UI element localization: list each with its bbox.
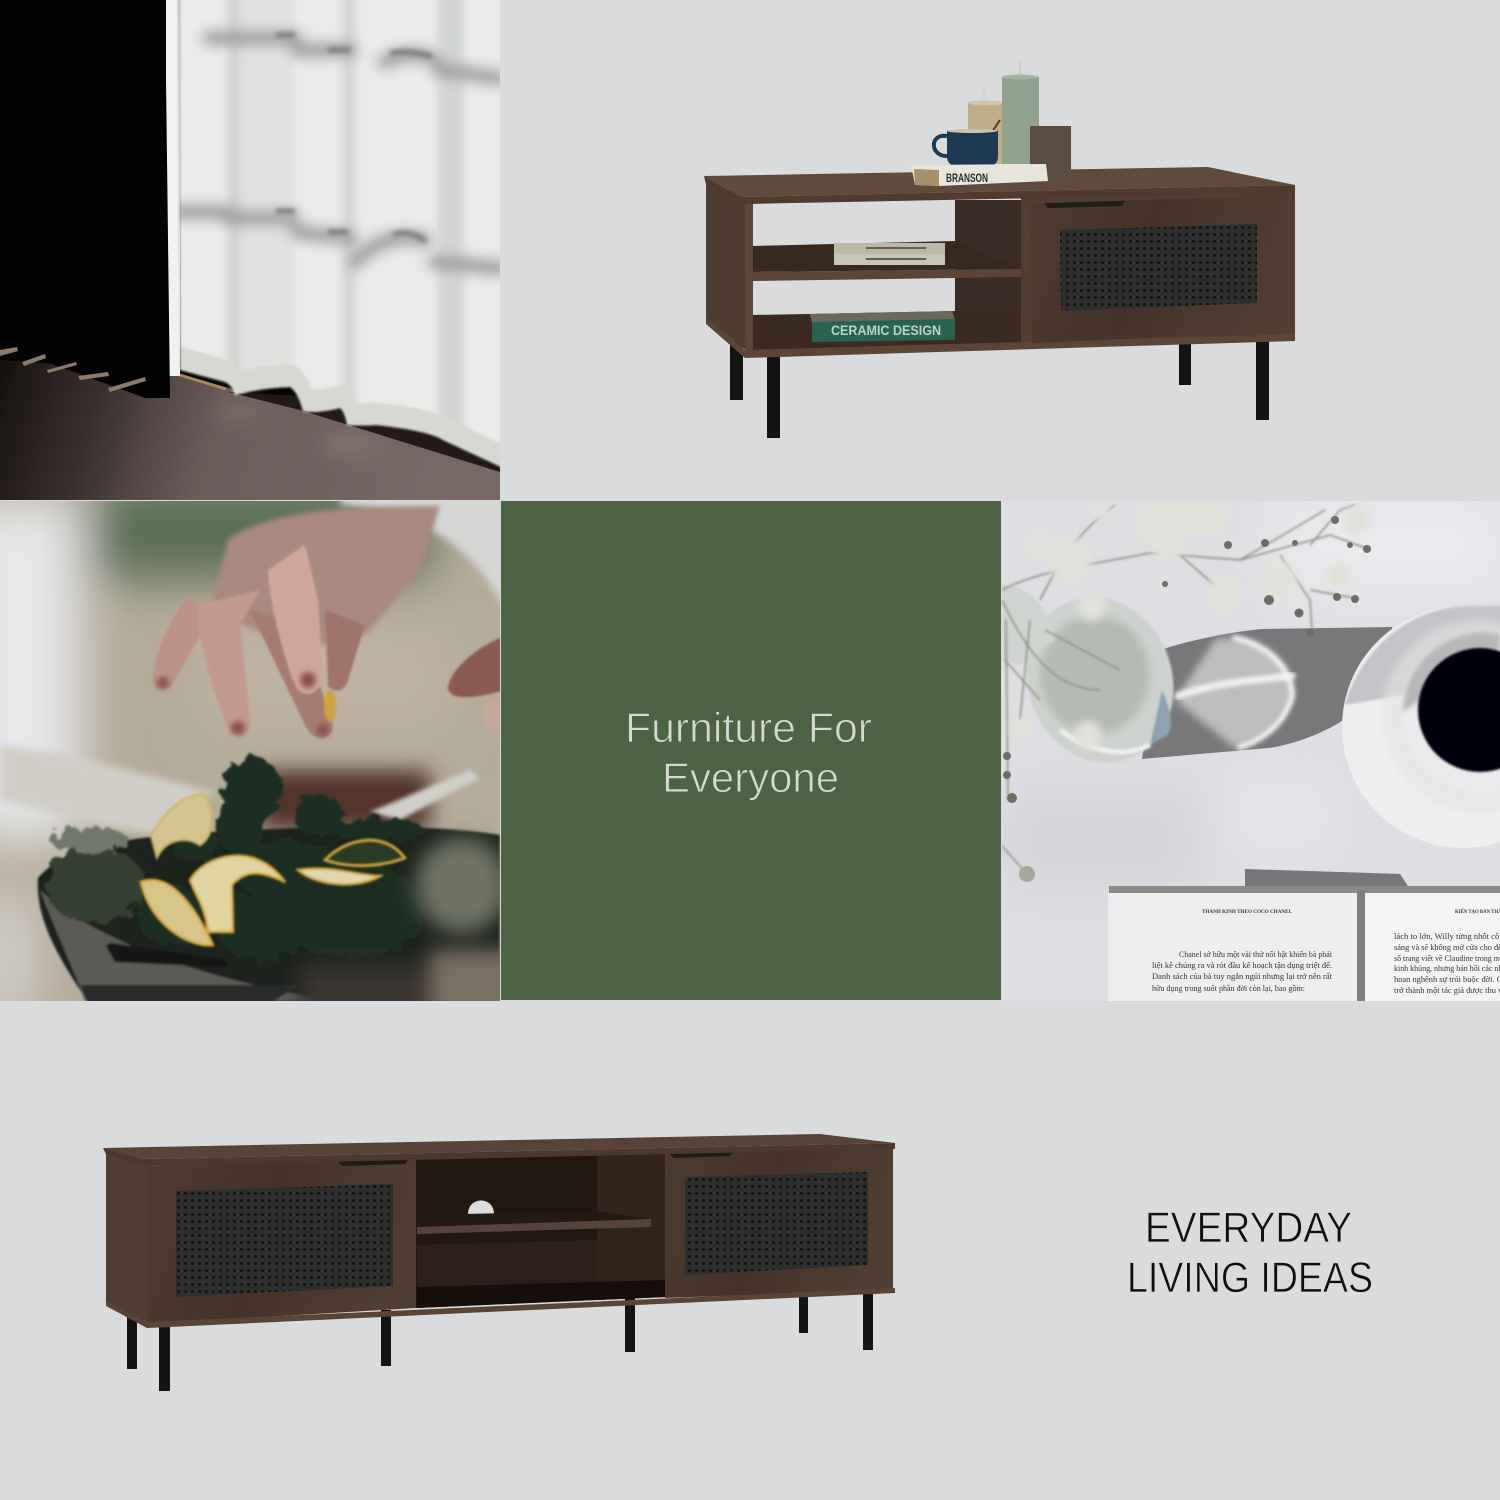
- tagline: [1127, 1204, 1373, 1302]
- table top: [704, 167, 1295, 197]
- cable hole: [468, 1200, 494, 1214]
- right inner wall: [597, 1153, 665, 1300]
- knife blade: [0, 745, 215, 835]
- brass strip: [178, 374, 226, 390]
- book: branson: BRANSON: [946, 171, 988, 185]
- window shadow bands: [180, 35, 500, 268]
- base strip: [106, 1288, 895, 1328]
- right door: [665, 1147, 893, 1298]
- title: [625, 704, 872, 801]
- side panel: [706, 183, 748, 352]
- cup: [1499, 635, 1500, 651]
- tagline: LIVING IDEAS: [1127, 1254, 1373, 1302]
- light streaks: [1178, 638, 1292, 747]
- glass vase: [1002, 585, 1175, 763]
- base strip: [706, 317, 1295, 358]
- light patches on carpet: [226, 403, 368, 454]
- left door: [148, 1158, 416, 1324]
- cup shadow: [1403, 632, 1500, 712]
- rattan panel: [1060, 224, 1257, 311]
- bright gap: [166, 0, 180, 376]
- lemon held in fingers: [324, 690, 336, 722]
- dark sill under curtain: [228, 392, 500, 472]
- panel: cooking photo: [0, 501, 500, 1001]
- tagline: EVERYDAY: [1145, 1204, 1352, 1252]
- right hand finger: [448, 636, 505, 732]
- lower back panel: [417, 1240, 597, 1288]
- left side: [106, 1153, 150, 1324]
- drawer backing: [1021, 186, 1295, 348]
- candles: [968, 61, 1071, 180]
- sheer white curtain: [177, 0, 500, 468]
- dried flower stems: [1002, 505, 1366, 874]
- book page text: THÀNH KINH THEO COCO CHANEL: [1202, 907, 1292, 915]
- sleeve: [340, 495, 505, 610]
- title: Everyone: [662, 754, 839, 801]
- book page text: hoan nghênh sự trói buộc đời. Ca: [1394, 975, 1500, 984]
- book page text: trở thành một tác giả được thu về: [1394, 986, 1500, 995]
- bottom right shadow: [292, 958, 437, 1001]
- shelf surface: [417, 1211, 650, 1227]
- light refraction in shadow: [1175, 638, 1292, 748]
- bottom shelf: [753, 310, 1022, 352]
- chef hand: [153, 506, 440, 738]
- top edge: [103, 1143, 895, 1166]
- lower right corner vignette: [418, 937, 500, 1001]
- floor slits of light: [0, 347, 146, 392]
- baby's breath blossoms: [1011, 491, 1371, 749]
- shelf edge: [417, 1219, 651, 1234]
- panel: coffee table product photo: [704, 61, 1295, 438]
- saucer well: [1384, 620, 1500, 697]
- book page text: hữu dụng trong suốt phần đời còn lại, bao gồm:: [1152, 984, 1305, 993]
- cloth tones: [1023, 506, 1494, 868]
- book page text: sáng và sẽ không mở cửa cho đến: [1394, 943, 1500, 952]
- table legs: [730, 335, 1269, 438]
- left handle: [338, 1159, 409, 1166]
- coffee: [1418, 648, 1500, 772]
- open book: [1108, 869, 1500, 1001]
- mug: [934, 129, 998, 166]
- book page text: liệt kê chúng ra và rót đầu kế hoạch tận dụng triệt để.: [1152, 961, 1332, 970]
- drawer: [1030, 195, 1285, 343]
- panel: TV stand product photo: [103, 1134, 895, 1391]
- lemons: [141, 795, 405, 945]
- carpet floor: [0, 360, 500, 500]
- book page text: Danh sách của bà tuy ngắn ngủi nhưng lại trở nên rất: [1152, 972, 1333, 981]
- top: [103, 1134, 895, 1159]
- dark drape: [51, 82, 170, 398]
- saucer shadow: [1345, 606, 1500, 705]
- stand legs: [127, 1285, 873, 1391]
- pale leaves on right: [416, 837, 508, 933]
- cast shadow: [1142, 627, 1400, 759]
- book page text: [1152, 907, 1500, 995]
- title: Furniture For: [625, 704, 872, 751]
- books on shelf: [834, 243, 945, 265]
- buds: [1003, 516, 1371, 803]
- book: branson: [911, 164, 1048, 186]
- serving spoon: [370, 770, 480, 820]
- greens: [136, 756, 425, 961]
- drawer handle: [1044, 201, 1125, 208]
- brown table band: [260, 770, 430, 830]
- middle shelf: [753, 241, 1021, 272]
- book: ceramic design: [810, 311, 955, 342]
- curtain hem: [178, 358, 520, 465]
- right rattan: [685, 1172, 868, 1275]
- saucer: [1342, 606, 1500, 848]
- panel: green title block: [501, 501, 1001, 1000]
- book page text: Chanel sở hữu một vài thứ nổi bật khiến bà phải: [1179, 950, 1333, 959]
- right handle: [668, 1151, 734, 1158]
- blurred background: [0, 480, 450, 1020]
- book page text: lách to lớn, Willy từng nhốt cô ở: [1394, 932, 1500, 941]
- book: ceramic design: CERAMIC DESIGN: [831, 322, 941, 338]
- middle compartment: [416, 1152, 665, 1308]
- pan body: [38, 827, 500, 1005]
- fingertip tones: [157, 672, 329, 736]
- left leaves: [45, 828, 145, 923]
- lower floor: [417, 1280, 665, 1308]
- panel: curtain photo: [0, 0, 540, 500]
- bud at stem end: [1019, 866, 1035, 882]
- open shelving back panels: [955, 200, 1022, 340]
- panel: coffee and book photo: [1000, 490, 1500, 1001]
- left rattan: [176, 1184, 393, 1297]
